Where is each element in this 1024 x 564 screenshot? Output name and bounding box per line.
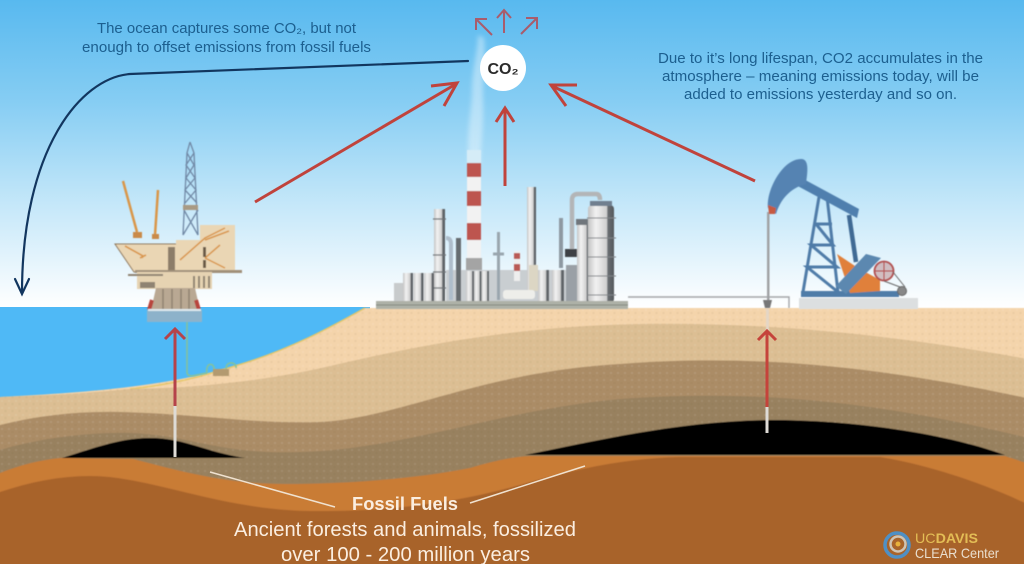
chimney stack [466, 150, 482, 272]
second tall column [577, 220, 590, 303]
logo mark [885, 533, 909, 557]
CO2 circle: CO₂ [487, 61, 519, 78]
UC Davis logo: CLEAR Center [915, 545, 999, 561]
leg stripes [163, 289, 189, 309]
overhead pipe [572, 194, 600, 250]
refinery base [376, 301, 628, 309]
big column [588, 205, 614, 303]
second tall column cap [576, 219, 591, 225]
layer: brown sediment [0, 360, 1024, 564]
layer: tan sediment [0, 324, 1024, 564]
crank arm [836, 254, 881, 294]
atmosphere caption: added to emissions yesterday and so on. [684, 87, 957, 103]
fossil fuel deposit: right [525, 420, 1005, 455]
base shadow rail [376, 304, 628, 306]
horsehead [768, 159, 807, 214]
offshore platform [115, 142, 242, 376]
refinery [376, 150, 789, 309]
pitman arm [849, 215, 856, 262]
dark hopper [565, 249, 578, 257]
layer: orange rock [0, 456, 1024, 564]
counterweight [837, 254, 880, 293]
left column rings [433, 219, 446, 288]
layer: surface sand [0, 308, 1024, 564]
UC Davis logo [885, 530, 999, 561]
left module shadow [168, 247, 175, 271]
thin mast [559, 218, 563, 268]
speckle texture [0, 308, 1024, 564]
big column cap [590, 201, 612, 206]
deck beam [135, 270, 242, 273]
horsehead tip [768, 205, 776, 214]
ground layers [0, 308, 1024, 564]
tall grey column [527, 187, 536, 291]
extraction arrow: onshore [758, 331, 776, 433]
coastline edge [130, 308, 365, 389]
platform legs [151, 288, 200, 310]
derrick mid deck [183, 205, 198, 210]
horizontal tank [503, 290, 535, 299]
red stripes [467, 163, 481, 240]
seabed pipeline [187, 322, 236, 376]
left module struts [125, 246, 146, 258]
crane booms [123, 181, 158, 235]
right module [176, 225, 235, 272]
right tanks [538, 270, 564, 303]
red brace right [196, 300, 199, 310]
right module struts [180, 228, 229, 268]
walking beam [794, 175, 859, 218]
chimney base [466, 258, 482, 272]
left tanks [403, 273, 434, 303]
lower deck [137, 272, 212, 289]
ocean caption: The ocean captures some CO₂, but not [97, 21, 356, 37]
blue side pipe [446, 238, 451, 300]
dark side column [456, 238, 461, 301]
connector pipe [628, 297, 789, 308]
atmosphere caption [658, 51, 983, 103]
sky background [0, 0, 1024, 308]
polished rod [767, 212, 770, 302]
tower frame [803, 197, 838, 292]
smoke plume [468, 35, 485, 165]
derrick tower [183, 142, 198, 235]
chimney tanks [466, 271, 489, 303]
ocean capture arrow [15, 61, 468, 294]
fossil fuels caption [234, 493, 576, 564]
arrows: CO2 radiating out [476, 10, 537, 35]
extraction arrow: offshore [165, 329, 185, 457]
ocean caption: enough to offset emissions from fossil fuels [82, 40, 371, 56]
fossil fuel deposit: left [62, 438, 245, 458]
right module windows [203, 247, 206, 268]
big column rings [587, 218, 616, 295]
small tank [394, 283, 403, 301]
pontoon [147, 310, 202, 322]
red brace left [149, 300, 152, 310]
seabed manifold [213, 369, 229, 376]
ocean [0, 307, 370, 402]
ocean caption [82, 21, 371, 56]
layer: grey-brown sediment [0, 396, 1024, 564]
pumpjack [763, 159, 918, 331]
fossil fuels caption: Ancient forests and animals, fossilized [234, 518, 576, 541]
arrow: refinery to CO2 [496, 108, 514, 186]
logo text: UCDAVIS [915, 530, 978, 546]
striped small stack [514, 251, 520, 281]
crane bases [133, 232, 159, 239]
concrete pad [799, 298, 918, 309]
left column [434, 209, 445, 303]
fossil fuel pointer lines [210, 466, 585, 507]
wellhead [763, 300, 772, 308]
arrow: pumpjack to CO2 [551, 85, 755, 181]
atmosphere caption: atmosphere – meaning emissions today, will be [662, 69, 979, 85]
layer: dark brown rock [0, 457, 1024, 564]
centre mast [493, 232, 504, 300]
flywheel [874, 262, 894, 280]
atmosphere caption: Due to it’s long lifespan, CO2 accumulates in the [658, 51, 983, 67]
dotted block [566, 265, 578, 303]
small pulley and belt [884, 272, 906, 296]
well casing below ground [766, 309, 769, 331]
CO2 circle [480, 45, 526, 91]
pump base [801, 291, 899, 297]
lower deck equipment [128, 274, 210, 288]
cream column [529, 265, 538, 291]
arrow: platform to CO2 [255, 83, 457, 202]
pontoon top edge [148, 309, 201, 311]
left module [115, 244, 178, 272]
fossil fuels caption: Fossil Fuels [352, 493, 458, 514]
background pipework [446, 270, 566, 301]
